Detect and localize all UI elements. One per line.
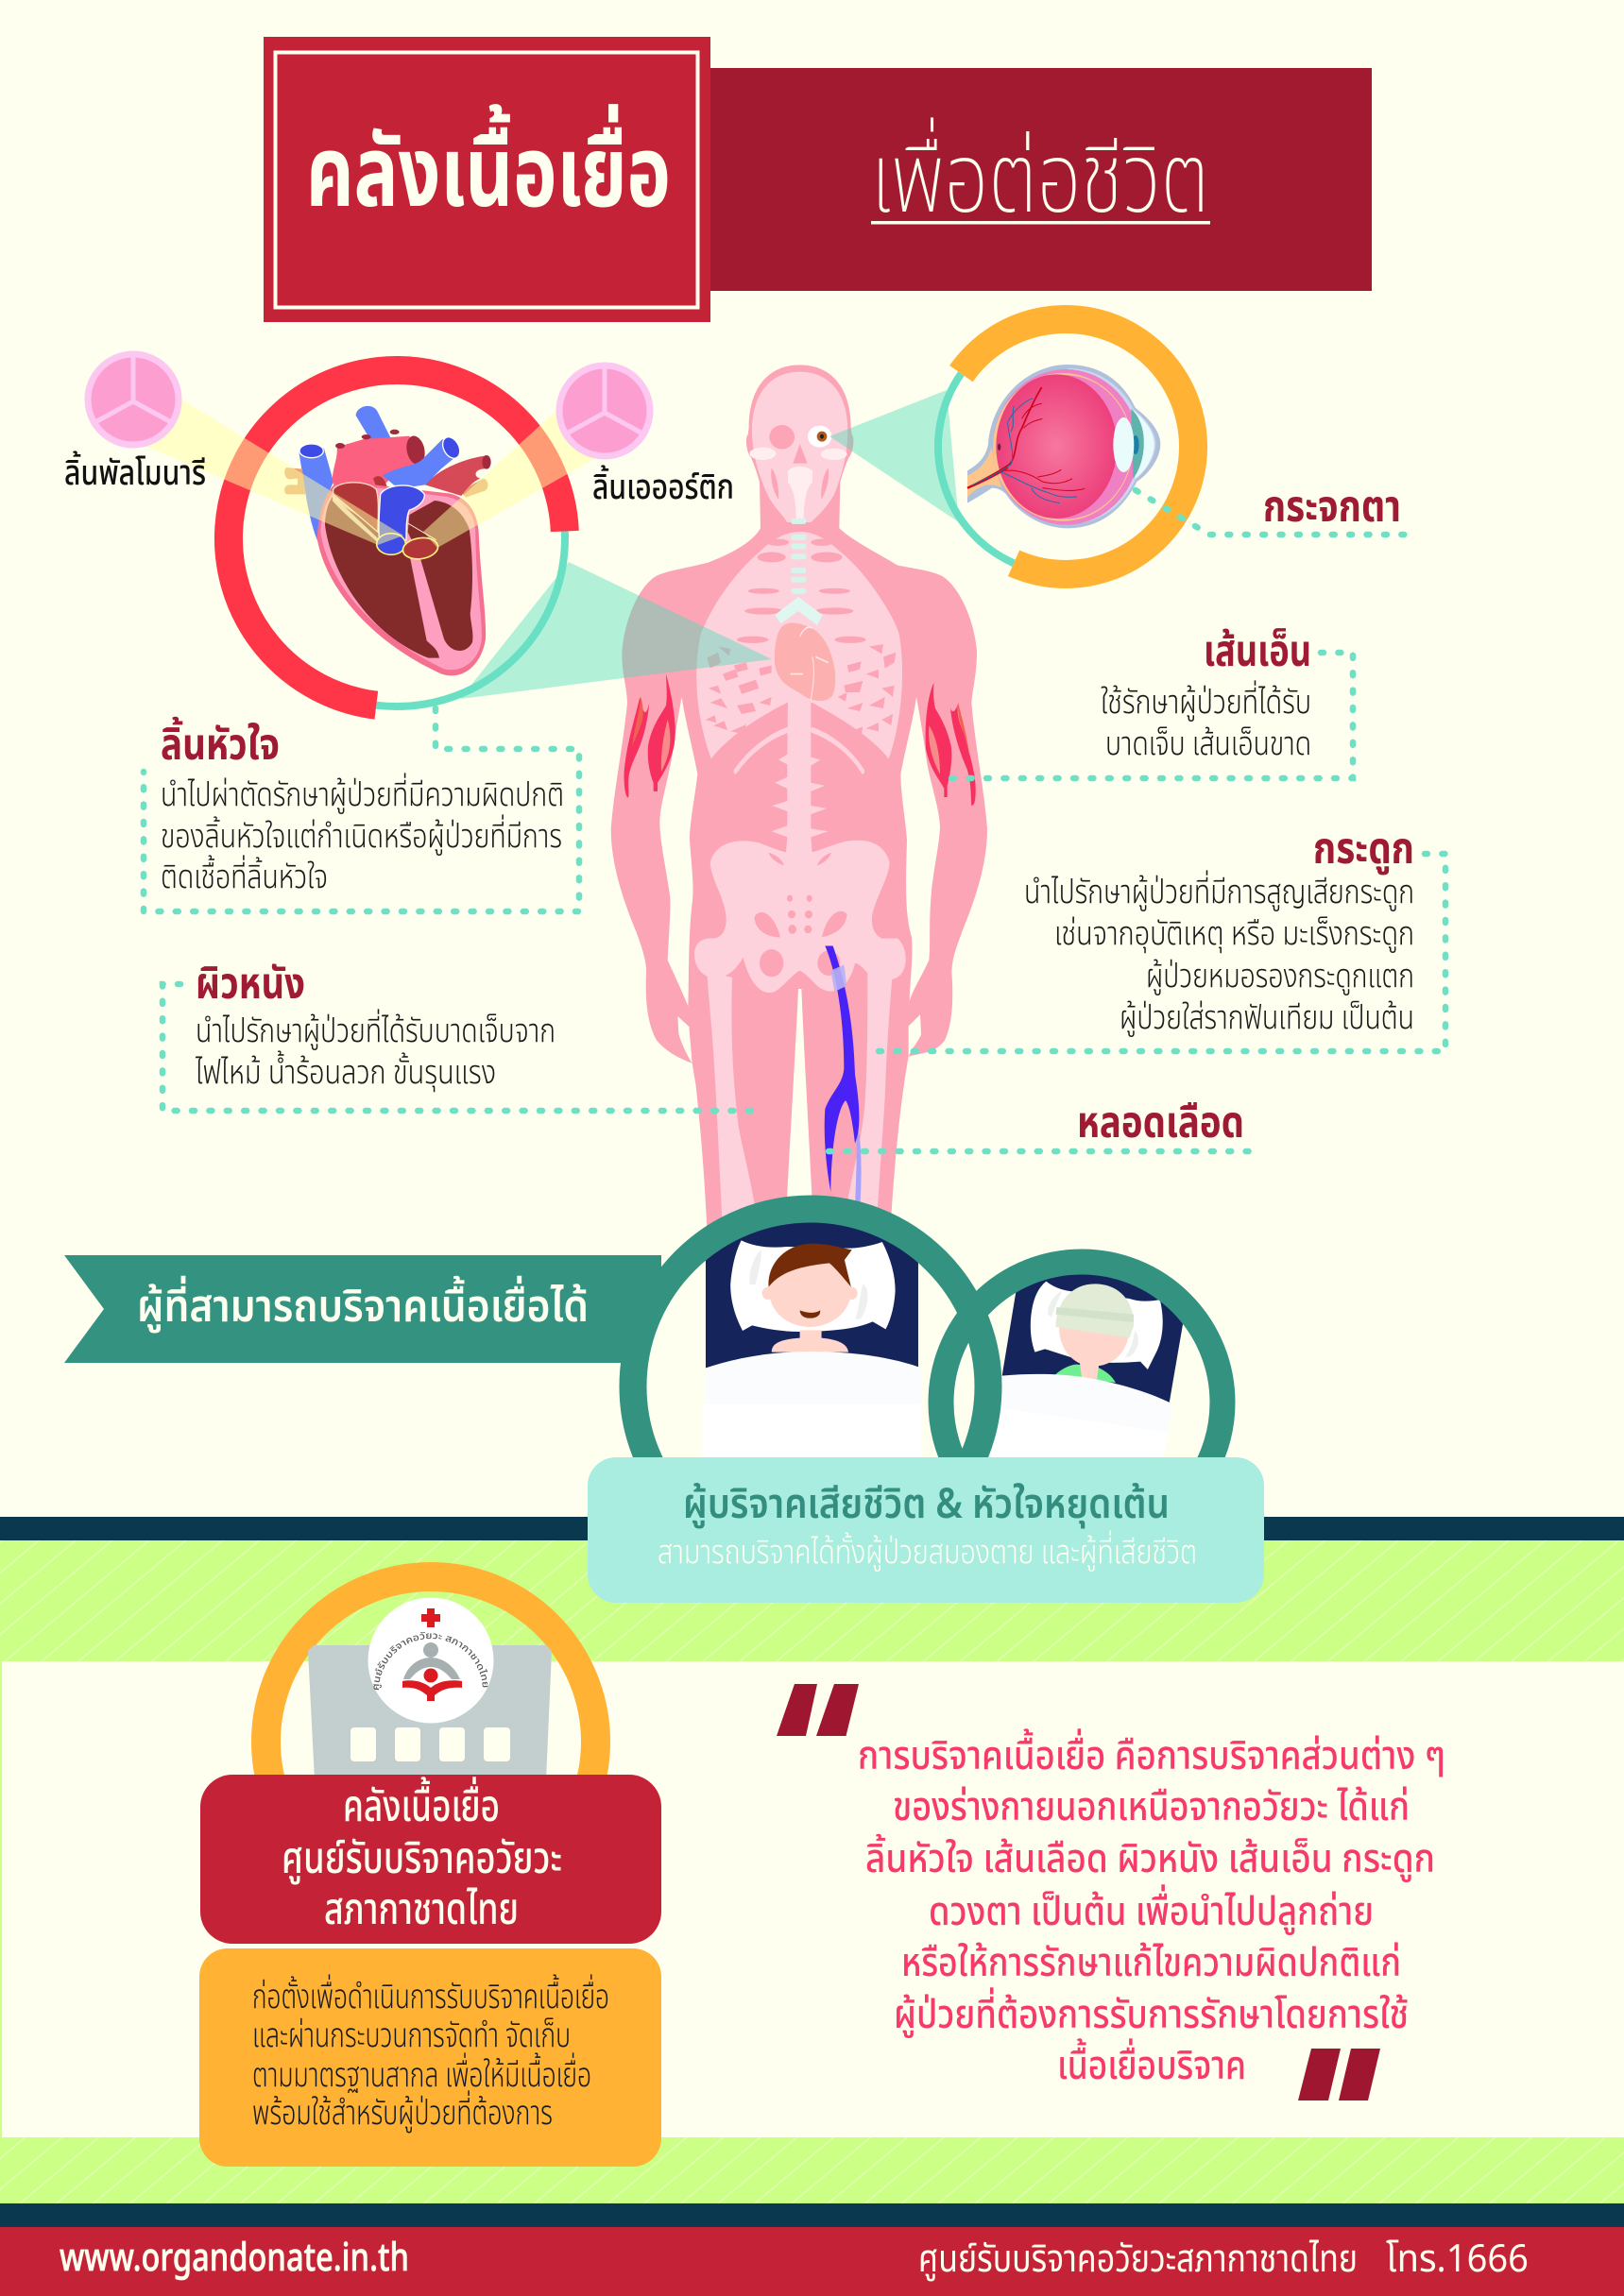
title: red square	[264, 37, 710, 322]
heart body	[317, 485, 486, 675]
quote text: ดวงตา เป็นต้น เพื่อนำไปปลูกถ่าย	[929, 1882, 1374, 1943]
footer: ศูนย์รับบริจาคอวัยวะสภากาชาดไทย	[918, 2232, 1358, 2288]
blue atrium	[379, 485, 424, 541]
human body illustration	[611, 365, 987, 1269]
callout: bone: ผู้ป่วยหมอรองกระดูกแตก	[1146, 952, 1414, 1002]
callout: skin: ผิวหนัง	[196, 952, 305, 1018]
panel: tissue bank name: ศูนย์รับบริจาคอวัยวะ	[282, 1827, 562, 1893]
skull	[752, 372, 847, 522]
callout: tendon: เส้นเอ็น	[1204, 620, 1311, 686]
icon: tissue bank building and logo: ศูนย์รับบริจาคอวัยวะ สภากาชาดไทย	[373, 1632, 487, 1691]
callout: bone: กระดูก	[1313, 817, 1414, 883]
footer: www.organdonate.in.th	[60, 2230, 409, 2288]
panel: tissue bank name	[200, 1775, 661, 1944]
callout: heart valve: ลิ้นหัวใจ	[161, 713, 280, 779]
callout: bone: นำไปรักษาผู้ป่วยที่มีการสูญเสียกระดูก	[1024, 868, 1414, 918]
footer	[0, 2227, 1624, 2296]
panel: tissue bank description	[199, 1948, 661, 2167]
panel: deceased donors	[588, 1457, 1264, 1603]
icon: pulmonary valve	[88, 354, 179, 445]
blood vessel	[825, 946, 862, 1258]
callout: heart valve	[161, 713, 564, 903]
quote text: ของร่างกายนอกเหนือจากอวัยวะ ได้แก่	[893, 1777, 1410, 1838]
callout: blood vessel: หลอดเลือด	[1077, 1091, 1244, 1157]
quote text: เนื้อเยื่อบริจาค	[1057, 2036, 1246, 2097]
circle backgrounds	[633, 1209, 988, 1564]
callout: tendon	[1101, 620, 1311, 770]
beam: pulmonary valve	[145, 398, 403, 545]
panel: tissue bank description: และผ่านกระบวนการจัดทำ จัดเก็บ	[252, 2012, 571, 2063]
windows	[350, 1727, 510, 1761]
quote text: การบริจาคเนื้อเยื่อ คือการบริจาคส่วนต่าง ๆ	[858, 1726, 1445, 1787]
callout: heart valve: ติดเชื้อที่ลิ้นหัวใจ	[161, 853, 328, 903]
callout: cornea: กระจกตา	[1263, 475, 1401, 541]
callout: bone: ผู้ป่วยใส่รากฟันเทียม เป็นต้น	[1120, 994, 1414, 1044]
small eye	[808, 426, 831, 448]
callout: heart valve: ของลิ้นหัวใจแต่กำเนิดหรือผู้ป่วยที่มีการ	[161, 812, 562, 862]
beam: aortic valve	[423, 408, 597, 548]
femurs	[707, 972, 763, 1269]
rings	[633, 1209, 988, 1564]
eye sockets and nose	[769, 425, 795, 449]
ring	[266, 1577, 595, 1906]
banner: who can donate	[64, 1255, 661, 1363]
quote text: หรือให้การรักษาแก้ไขความผิดปกติแก่	[901, 1933, 1401, 1994]
callout: skin	[195, 952, 556, 1098]
ring: eye	[938, 319, 1193, 574]
chambers	[325, 498, 439, 658]
body silhouette	[611, 365, 987, 1269]
rib slits	[706, 539, 896, 736]
label: pulmonary valve: ลิ้นพัลโมนารี	[64, 448, 206, 501]
aorta	[333, 436, 420, 491]
footer: โทร.1666	[1386, 2232, 1529, 2288]
pelvis holes	[754, 853, 847, 977]
tendons left arm	[624, 674, 675, 798]
callout: bone	[1024, 817, 1414, 1044]
banner: who can donate: ผู้ที่สามารถบริจาคเนื้อเยื่อได้	[137, 1275, 589, 1342]
quote text	[858, 1726, 1445, 2097]
valves in heart	[377, 534, 405, 554]
spine and lower ribs	[772, 697, 829, 858]
callout: heart valve: นำไปผ่าตัดรักษาผู้ป่วยที่มีความผิดปกติ	[161, 771, 564, 821]
tendons right arm	[926, 683, 976, 806]
building	[308, 1645, 552, 1780]
vessels behind	[299, 449, 333, 545]
heart on torso	[774, 621, 836, 703]
cheek bones	[749, 448, 847, 460]
patient: left	[702, 1209, 921, 1461]
logo	[368, 1598, 493, 1723]
panel: tissue bank description: ก่อตั้งเพื่อดำเนินการรับบริจาคเนื้อเยื่อ	[252, 1973, 609, 2024]
title: main heading: คลังเนื้อเยื่อ	[306, 102, 671, 250]
panel: deceased donors: ผู้บริจาคเสียชีวิต & หัวใจหยุดเต้น	[683, 1473, 1170, 1537]
panel: deceased donors: สามารถบริจาคได้ทั้งผู้ป่วยสมองตาย และผู้ที่เสียชีวิต	[658, 1528, 1197, 1578]
vertebrae	[775, 519, 823, 625]
callout: tendon: ใช้รักษาผู้ป่วยที่ได้รับ	[1101, 678, 1311, 728]
panel: tissue bank name: คลังเนื้อเยื่อ	[343, 1775, 500, 1841]
panel: tissue bank description: พร้อมใช้สำหรับผู้ป่วยที่ต้องการ	[252, 2089, 553, 2140]
callout: bone: เช่นจากอุบัติเหตุ หรือ มะเร็งกระดูก	[1054, 910, 1414, 960]
neck column	[788, 467, 812, 519]
title: dark banner	[710, 68, 1372, 291]
title block	[264, 37, 1372, 322]
pulmonary	[383, 439, 460, 488]
ring: heart	[229, 370, 565, 706]
pelvis	[694, 841, 906, 993]
callout: tendon: บาดเจ็บ เส้นเอ็นขาด	[1105, 720, 1311, 770]
patient: right	[988, 1275, 1183, 1457]
donor circles	[620, 1196, 1236, 1457]
beam: heart zoom	[460, 562, 772, 699]
title: subtitle: เพื่อต่อชีวิต	[871, 110, 1209, 255]
quote text: ผู้ป่วยที่ต้องการรับการรักษาโดยการใช้	[894, 1985, 1409, 2046]
illustration: heart	[284, 406, 491, 675]
rib cage	[696, 532, 902, 758]
quote text: ลิ้นหัวใจ เส้นเลือด ผิวหนัง เส้นเอ็น กระดูก	[865, 1829, 1435, 1890]
callout: skin: นำไปรักษาผู้ป่วยที่ได้รับบาดเจ็บจาก	[196, 1007, 556, 1057]
quote mark: closing	[1298, 2049, 1380, 2100]
label: aortic valve: ลิ้นเอออร์ติก	[592, 462, 734, 515]
icon: aortic valve	[559, 366, 650, 456]
lower bands	[0, 1517, 1624, 2227]
panel: tissue bank description: ตามมาตรฐานสากล เพื่อให้มีเนื้อเยื่อ	[252, 2051, 591, 2102]
dotted connectors	[144, 490, 1445, 1151]
illustration: eyeball	[967, 365, 1160, 528]
quote mark: opening	[777, 1684, 859, 1736]
callout: skin: ไฟไหม้ น้ำร้อนลวก ขั้นรุนแรง	[195, 1048, 496, 1098]
beam: eye zoom	[829, 390, 959, 522]
icon: tissue bank building and logo	[251, 1562, 610, 1775]
panel: tissue bank name: สภากาชาดไทย	[324, 1878, 519, 1944]
